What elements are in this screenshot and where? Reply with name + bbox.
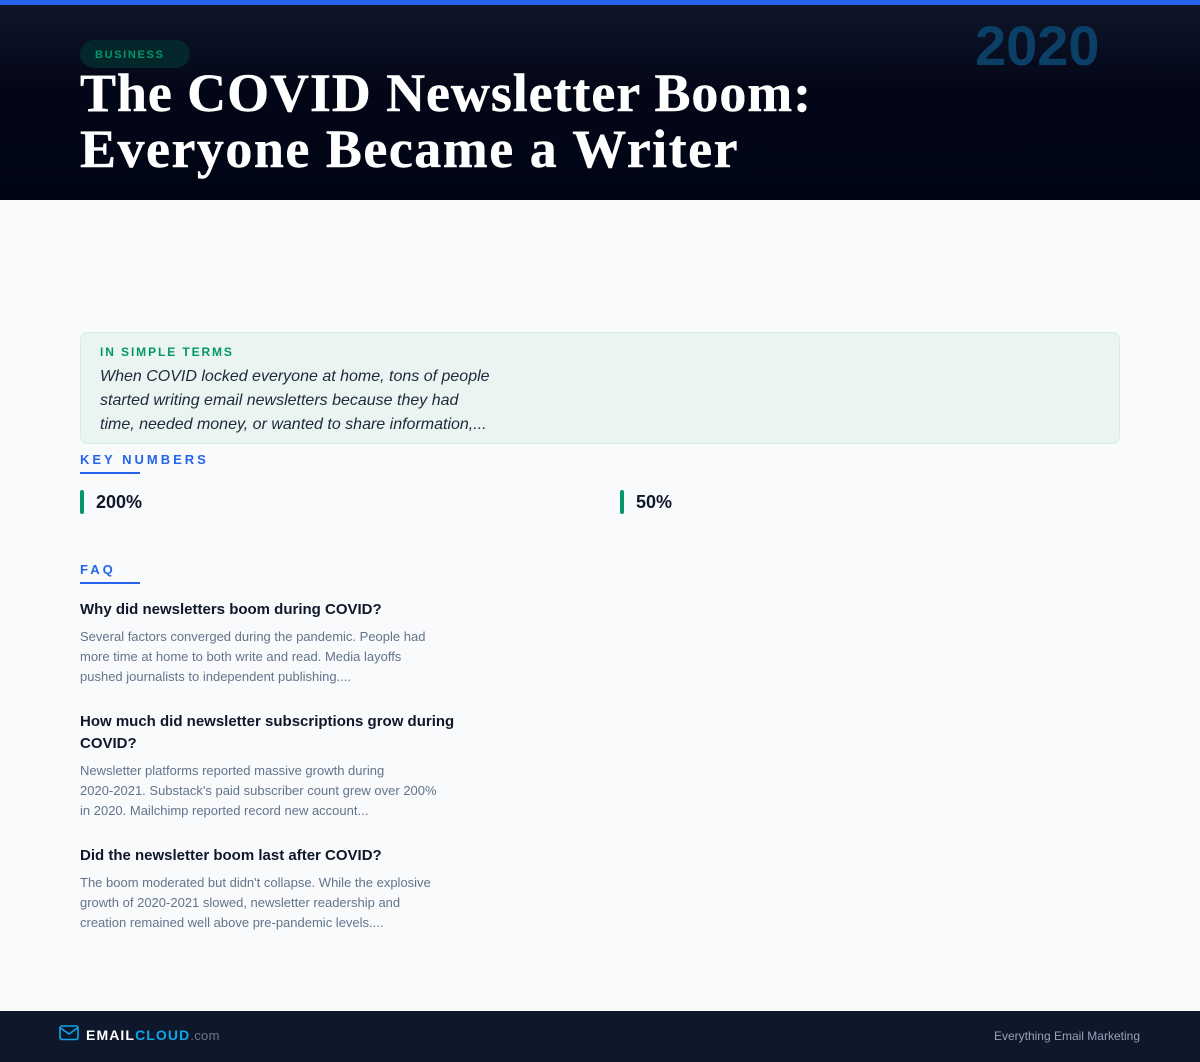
year: 2020 [975,14,1100,77]
panel: in simple terms [80,332,1120,444]
stat: 200% [80,490,142,514]
stat: 50% [620,490,672,514]
faq item 1: Several factors converged during the pandemic. People had [80,629,425,644]
panel text: time, needed money, or wanted to share information,... [100,416,487,433]
category badge [80,40,190,68]
faq item 2: How much did newsletter subscriptions grow during [80,713,454,730]
faq item 1: more time at home to both write and read. Media layoffs [80,649,401,664]
faq item 2: in 2020. Mailchimp reported record new account... [80,803,368,818]
faq item 2: COVID? [80,735,137,752]
faq item 3: growth of 2020-2021 slowed, newsletter readership and [80,895,400,910]
heading: FAQ: FAQ [80,562,116,577]
faq item 3: The boom moderated but didn't collapse. While the explosive [80,875,431,890]
footer [0,1011,1200,1062]
title: The COVID Newsletter Boom: [80,63,812,123]
title [80,63,812,179]
top accent bar [0,0,1200,5]
faq item 2: Newsletter platforms reported massive growth during [80,763,384,778]
title: Everyone Became a Writer [80,119,739,179]
brand logo text: EMAILCLOUD.com [86,1027,220,1043]
faq item 1: pushed journalists to independent publishing.... [80,669,351,684]
faq item 3: Did the newsletter boom last after COVID? [80,847,382,864]
stat: 200%: 200% [96,492,142,512]
heading: key numbers: KEY NUMBERS [80,452,209,467]
faq item 1: Why did newsletters boom during COVID? [80,601,382,618]
faq item 1 [80,601,425,684]
panel text [100,368,490,433]
faq item 3: creation remained well above pre-pandemic levels.... [80,915,384,930]
tagline: Everything Email Marketing [994,1029,1140,1043]
header band [0,0,1200,200]
panel text: When COVID locked everyone at home, tons of people [100,368,490,385]
panel text: started writing email newsletters because they had [100,392,458,409]
icon: envelope [59,1025,79,1040]
category badge: BUSINESS [95,49,164,61]
faq item 2: 2020-2021. Substack's paid subscriber count grew over 200% [80,783,437,798]
stat: 50%: 50% [636,492,672,512]
faq item 2 [80,713,454,818]
panel label: IN SIMPLE TERMS [100,345,234,359]
faq item 3 [80,847,431,930]
